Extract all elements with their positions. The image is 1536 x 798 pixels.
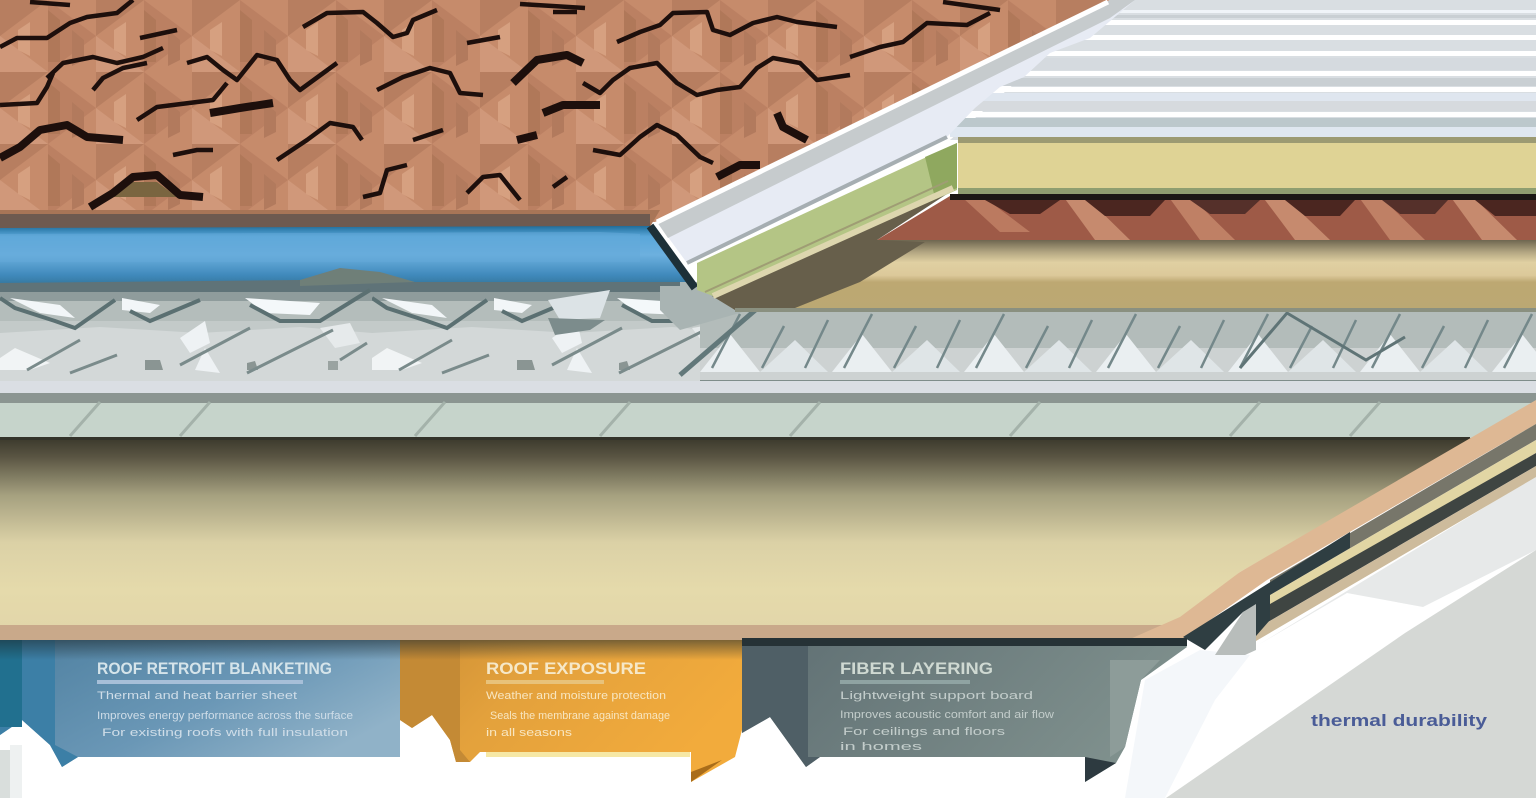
body text: Thermal and heat barrier sheet xyxy=(97,690,297,702)
timber plate xyxy=(0,625,1185,641)
white fascia board xyxy=(657,0,1135,263)
body text: Improves acoustic comfort and air flow xyxy=(840,709,1054,721)
caption: thermal durability xyxy=(1311,711,1488,730)
tan batten layer xyxy=(795,240,1536,308)
heading: ROOF EXPOSURE xyxy=(486,659,646,678)
shadow wedge under trim xyxy=(712,190,953,310)
gap brown pocket xyxy=(113,182,177,197)
body text: in homes xyxy=(840,741,923,753)
heading: ROOF RETROFIT BLANKETING xyxy=(97,659,332,678)
body text: in all seasons xyxy=(486,727,573,739)
body text: For ceilings and floors xyxy=(843,726,1006,738)
body text: Seals the membrane against damage xyxy=(490,710,670,722)
blue gutter xyxy=(0,226,695,288)
pale streak xyxy=(1258,476,1536,645)
cream insulation layer xyxy=(958,142,1536,190)
green trim xyxy=(697,143,957,296)
body text: For existing roofs with full insulation xyxy=(102,727,348,739)
body text xyxy=(486,690,670,739)
body text xyxy=(840,690,1054,753)
silver metal panels, top right xyxy=(950,0,1536,140)
body text xyxy=(97,690,353,739)
shingle layer, left xyxy=(0,283,720,381)
shingle layer, right xyxy=(700,306,1536,381)
ceiling wall gradient xyxy=(0,438,1475,625)
panel: middle orange xyxy=(400,640,742,782)
heading: FIBER LAYERING xyxy=(840,659,993,678)
panel: right slate xyxy=(742,638,1187,782)
roof tiles xyxy=(0,0,1110,230)
body text: Weather and moisture protection xyxy=(486,690,666,702)
tile cracks xyxy=(0,0,1000,200)
metal ledge xyxy=(0,381,1536,438)
body text: Lightweight support board xyxy=(840,690,1033,702)
lower right grey panel xyxy=(1166,550,1536,798)
red tile layer xyxy=(877,194,1536,242)
wood beam, right xyxy=(1130,400,1536,655)
panel: left blue xyxy=(0,640,400,767)
body text: Improves energy performance across the surface xyxy=(97,710,353,722)
